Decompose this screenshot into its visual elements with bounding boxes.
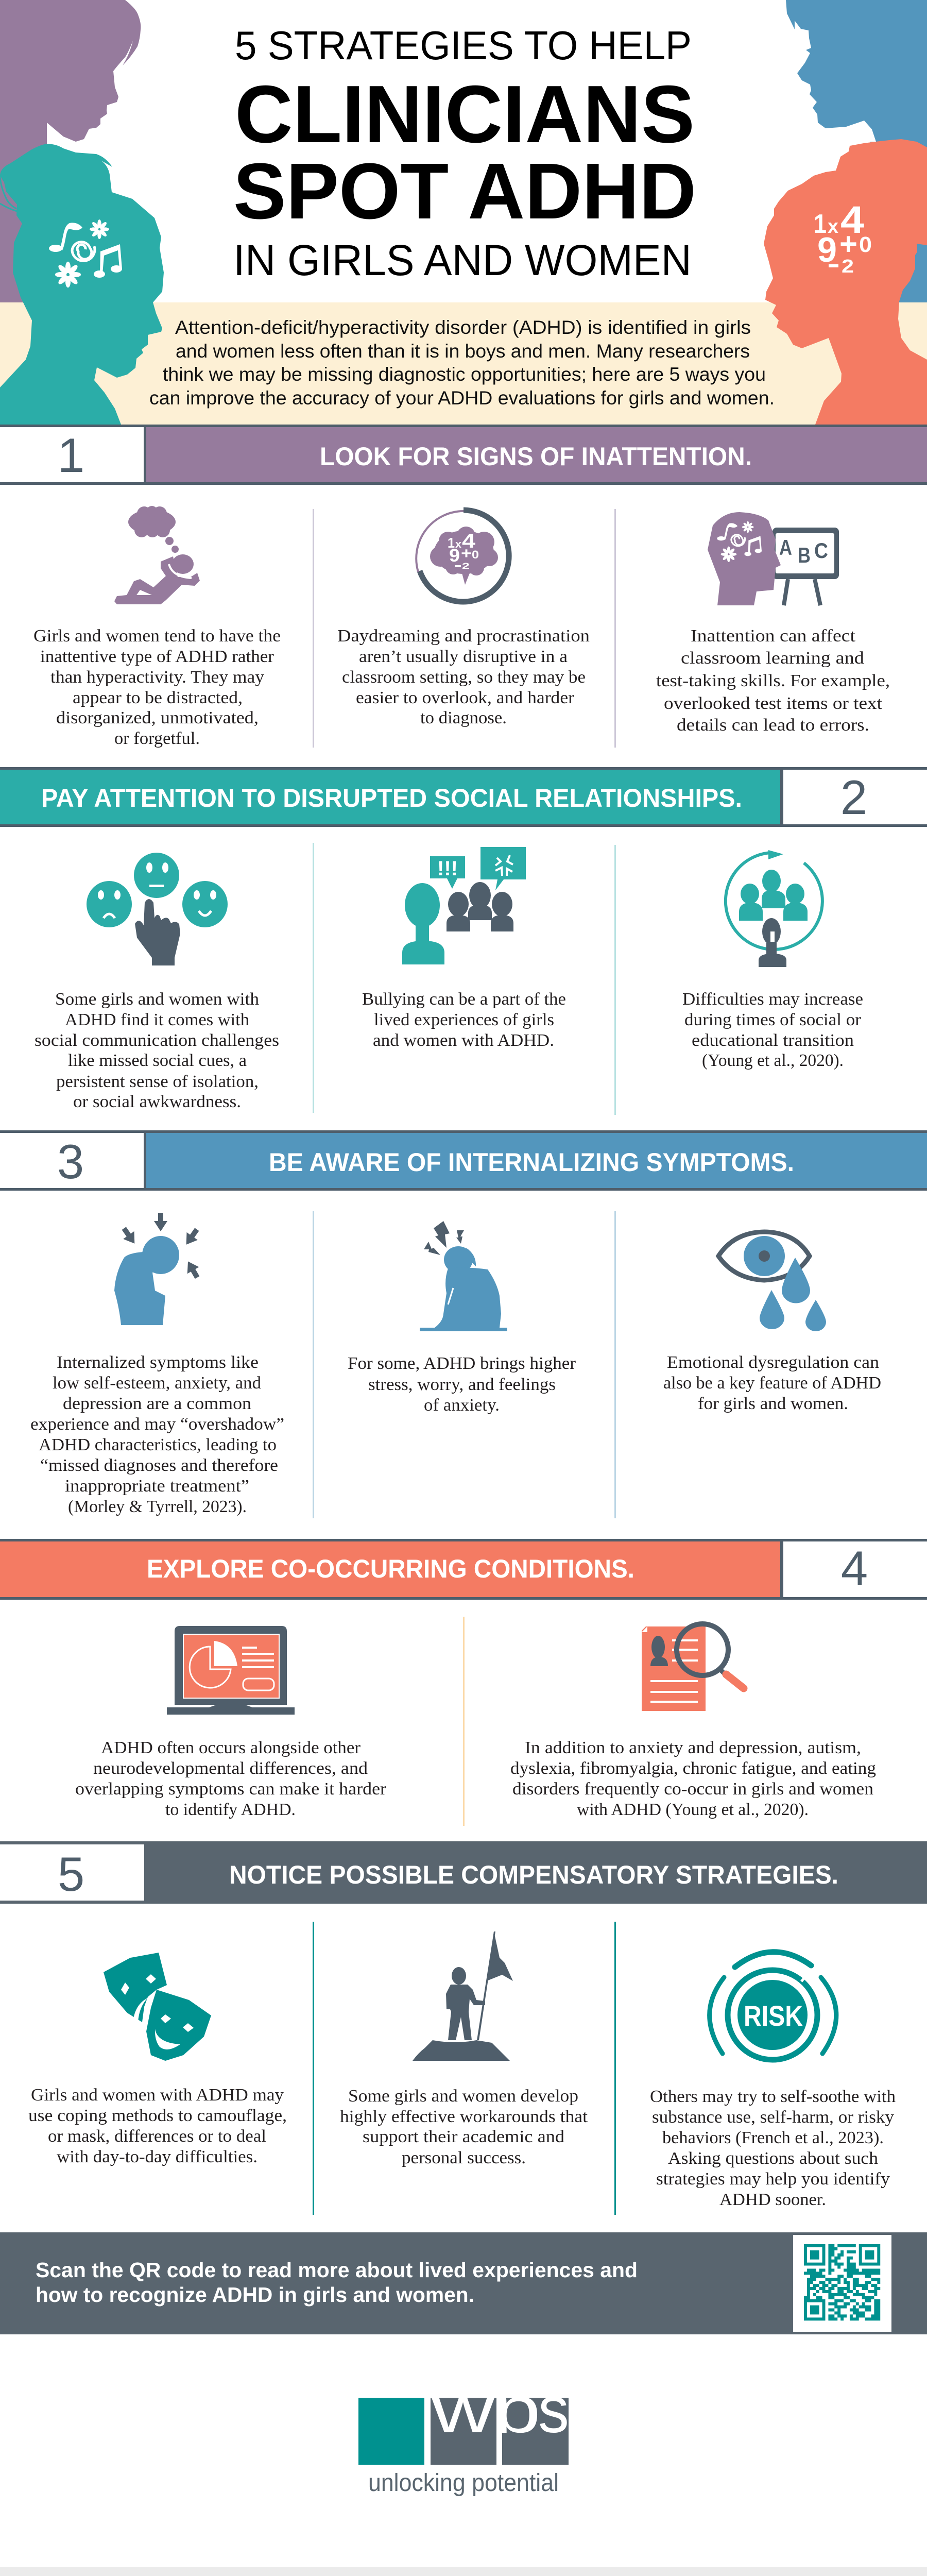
text: column 3 inattention: test-taking skills. For example, bbox=[656, 671, 890, 690]
text: co-occurring left: overlapping symptoms can make it harder bbox=[75, 1780, 387, 1799]
section 4 banner bbox=[0, 1539, 927, 1600]
section 4 banner: EXPLORE CO-OCCURRING CONDITIONS. bbox=[147, 1554, 634, 1583]
text: column 3 social: during times of social or bbox=[684, 1010, 862, 1029]
icon: risk dial: RISK bbox=[744, 1999, 803, 2032]
silhouette: coral woman with numbers: 1 bbox=[814, 209, 827, 239]
section 5 banner: 5 bbox=[58, 1847, 84, 1901]
text: column 2 social: lived experiences of girls bbox=[374, 1010, 554, 1029]
silhouette: coral woman with numbers: 9 bbox=[817, 230, 837, 269]
text: column 3 inattention: Inattention can affect bbox=[691, 626, 856, 646]
text: column 3 inattention: overlooked test items or text bbox=[664, 694, 883, 713]
references panel bbox=[0, 2567, 927, 2576]
text: column 3 internalizing bbox=[663, 1353, 881, 1413]
text: column 2 inattention: Daydreaming and procrastination bbox=[337, 626, 590, 646]
text: column 1 internalizing: “missed diagnoses and therefore bbox=[40, 1456, 278, 1475]
WPS logo: w bbox=[431, 2373, 495, 2447]
icon: faces and pointing hand bbox=[87, 853, 228, 965]
text: column 2 social: and women with ADHD. bbox=[373, 1031, 554, 1050]
silhouette: coral woman with numbers bbox=[764, 139, 927, 425]
silhouette: coral woman with numbers: + bbox=[839, 227, 857, 261]
icon: head and ABC board: A bbox=[779, 535, 792, 560]
text: co-occurring left: to identify ADHD. bbox=[165, 1800, 296, 1819]
section 1 banner: 1 bbox=[58, 428, 84, 482]
text: column 1 compensatory bbox=[28, 2086, 287, 2166]
text: column 2 inattention: aren’t usually disruptive in a bbox=[359, 647, 568, 666]
text: column 1 compensatory: or mask, differences or to deal bbox=[48, 2127, 266, 2146]
text: co-occurring right: disorders frequently co-occur in girls and women bbox=[512, 1780, 873, 1799]
text: column 1 inattention: than hyperactivity. They may bbox=[50, 668, 264, 687]
section 2 banner bbox=[0, 767, 927, 827]
QR code bbox=[793, 2235, 891, 2332]
text: column 2 social bbox=[362, 990, 566, 1050]
QR call-to-action banner bbox=[0, 2232, 927, 2334]
callout text bbox=[36, 2258, 638, 2307]
icon: risk dial bbox=[710, 1952, 836, 2060]
callout text: Scan the QR code to read more about lived experiences and bbox=[36, 2258, 638, 2282]
text: column 1 internalizing: Internalized symptoms like bbox=[57, 1353, 259, 1372]
text: column 1 social: social communication challenges bbox=[35, 1031, 279, 1050]
title: SPOT ADHD bbox=[233, 147, 696, 235]
icon: head and ABC board bbox=[708, 512, 839, 605]
section 4 banner: 4 bbox=[841, 1541, 868, 1595]
text: column 2 compensatory: personal success. bbox=[402, 2148, 526, 2167]
text: column 1 inattention: disorganized, unmotivated, bbox=[56, 708, 259, 727]
text: column 1 inattention: appear to be distracted, bbox=[73, 688, 243, 707]
intro text: can improve the accuracy of your ADHD evaluations for girls and women. bbox=[149, 387, 775, 409]
text: column 1 internalizing: depression are a common bbox=[63, 1394, 251, 1413]
text: column 3 internalizing: Emotional dysregulation can bbox=[667, 1353, 879, 1372]
text: column 2 inattention bbox=[337, 626, 590, 727]
text: column 2 compensatory: highly effective workarounds that bbox=[340, 2107, 588, 2126]
icon: head and ABC board: B bbox=[798, 543, 811, 567]
text: column 1 internalizing: inappropriate treatment” bbox=[65, 1477, 249, 1496]
icon: bullying speech bubbles: !!! bbox=[437, 857, 458, 880]
intro text: Attention-deficit/hyperactivity disorder (ADHD) is identified in girls bbox=[175, 317, 751, 338]
icon: ring with numbers in brain: x bbox=[455, 539, 461, 550]
silhouette: coral woman with numbers: x bbox=[828, 216, 838, 238]
text: column 1 inattention: or forgetful. bbox=[114, 729, 200, 748]
text: column 1 internalizing: (Morley & Tyrrell, 2023). bbox=[68, 1497, 247, 1516]
icon: crying eye bbox=[718, 1232, 826, 1331]
text: column 1 internalizing: low self-esteem, anxiety, and bbox=[53, 1374, 261, 1393]
icon: document with magnifier bbox=[642, 1624, 744, 1711]
silhouette: blue woman bbox=[786, 0, 927, 302]
section 2 banner: 2 bbox=[840, 770, 867, 824]
section 2 banner: PAY ATTENTION TO DISRUPTED SOCIAL RELATIONSHIPS. bbox=[41, 784, 742, 812]
text: column 1 social: or social awkwardness. bbox=[73, 1092, 241, 1111]
section 5 banner: NOTICE POSSIBLE COMPENSATORY STRATEGIES. bbox=[229, 1860, 838, 1889]
text: column 1 social: Some girls and women with bbox=[55, 990, 259, 1009]
silhouette: purple woman bbox=[0, 0, 141, 302]
text: co-occurring right: dyslexia, fibromyalgia, chronic fatigue, and eating bbox=[510, 1759, 876, 1778]
text: co-occurring left: ADHD often occurs alongside other bbox=[101, 1738, 361, 1757]
text: co-occurring right bbox=[510, 1738, 876, 1819]
icon: ring with numbers in brain bbox=[416, 510, 509, 602]
silhouette: coral woman with numbers: 0 bbox=[859, 232, 872, 257]
icon: ring with numbers in brain: + bbox=[461, 545, 472, 562]
text: column 1 social: like missed social cues, a bbox=[68, 1051, 247, 1070]
text: column 2 social: Bullying can be a part of the bbox=[362, 990, 566, 1009]
text: column 2 inattention: to diagnose. bbox=[420, 708, 507, 727]
silhouette: coral woman with numbers: 4 bbox=[840, 198, 864, 241]
text: column 2 internalizing: of anxiety. bbox=[424, 1396, 500, 1415]
text: co-occurring right: with ADHD (Young et al., 2020). bbox=[577, 1800, 809, 1819]
text: column 1 social bbox=[35, 990, 279, 1111]
text: column 3 social bbox=[682, 990, 863, 1070]
title: 5 STRATEGIES TO HELP bbox=[235, 23, 692, 68]
silhouette: coral woman with numbers: 2 bbox=[842, 256, 854, 277]
text: column 3 social: Difficulties may increase bbox=[682, 990, 863, 1009]
section 3 banner bbox=[0, 1130, 927, 1191]
text: column 3 compensatory: Others may try to self-soothe with bbox=[650, 2087, 896, 2106]
WPS logo: p bbox=[493, 2373, 541, 2447]
text: column 1 internalizing bbox=[30, 1353, 284, 1516]
text: column 1 inattention: inattentive type of ADHD rather bbox=[40, 647, 274, 666]
icon: pressured person with arrows bbox=[114, 1213, 203, 1325]
title: IN GIRLS AND WOMEN bbox=[233, 236, 692, 284]
text: column 2 inattention: easier to overlook, and harder bbox=[356, 688, 575, 707]
text: column 3 compensatory: substance use, self-harm, or risky bbox=[652, 2108, 894, 2127]
icon: daydreaming figure bbox=[114, 506, 200, 604]
text: co-occurring left: neurodevelopmental differences, and bbox=[93, 1759, 368, 1778]
intro text: think we may be missing diagnostic opportunities; here are 5 ways you bbox=[163, 364, 766, 385]
section 5 banner bbox=[0, 1841, 927, 1904]
WPS logo bbox=[358, 2373, 569, 2497]
icon: ring with numbers in brain: 2 bbox=[462, 561, 470, 571]
text: column 3 compensatory: Asking questions about such bbox=[668, 2149, 878, 2168]
section 1 banner: LOOK FOR SIGNS OF INATTENTION. bbox=[320, 442, 752, 471]
text: column 2 inattention: classroom setting, so they may be bbox=[342, 668, 586, 687]
text: column 3 inattention: classroom learning and bbox=[681, 649, 864, 668]
WPS logo: s bbox=[538, 2373, 569, 2447]
text: column 1 internalizing: ADHD characteristics, leading to bbox=[39, 1435, 277, 1454]
icon: transition circle with people bbox=[726, 850, 822, 967]
text: co-occurring left bbox=[75, 1738, 387, 1819]
text: column 3 social: educational transition bbox=[692, 1031, 854, 1050]
icon: bullying speech bubbles bbox=[402, 847, 526, 964]
text: column 1 compensatory: with day-to-day difficulties. bbox=[57, 2147, 258, 2166]
text: column 2 internalizing: For some, ADHD brings higher bbox=[348, 1354, 576, 1373]
text: column 1 inattention bbox=[33, 626, 281, 748]
icon: ring with numbers in brain: 0 bbox=[472, 548, 479, 561]
icon: monitor with chart bbox=[167, 1626, 295, 1715]
text: column 2 compensatory: support their academic and bbox=[363, 2127, 564, 2146]
text: column 3 inattention: details can lead to errors. bbox=[677, 716, 869, 735]
intro text bbox=[149, 317, 775, 409]
text: column 2 compensatory: Some girls and women develop bbox=[348, 2087, 578, 2106]
section 3 banner: BE AWARE OF INTERNALIZING SYMPTOMS. bbox=[269, 1148, 794, 1177]
icon: theatre masks bbox=[104, 1953, 211, 2061]
intro text: and women less often than it is in boys and men. Many researchers bbox=[176, 341, 750, 362]
text: column 3 internalizing: also be a key feature of ADHD bbox=[663, 1374, 881, 1393]
icon: person with flag on mountain bbox=[413, 1931, 513, 2061]
text: column 1 compensatory: use coping methods to camouflage, bbox=[28, 2106, 287, 2125]
icon: ring with numbers in brain: 1 bbox=[448, 535, 455, 551]
icon: ring with numbers in brain: 4 bbox=[462, 530, 475, 552]
text: column 3 compensatory: strategies may help you identify bbox=[656, 2170, 890, 2189]
callout text: how to recognize ADHD in girls and women. bbox=[36, 2283, 474, 2307]
silhouette: teal woman with music icons bbox=[0, 144, 164, 425]
text: column 1 social: persistent sense of isolation, bbox=[56, 1072, 259, 1091]
text: column 2 internalizing: stress, worry, and feelings bbox=[368, 1375, 556, 1394]
text: column 3 compensatory bbox=[650, 2087, 896, 2209]
text: co-occurring right: In addition to anxiety and depression, autism, bbox=[525, 1738, 861, 1757]
section 3 banner: 3 bbox=[57, 1134, 84, 1189]
text: column 2 compensatory bbox=[340, 2087, 588, 2167]
text: column 1 compensatory: Girls and women with ADHD may bbox=[31, 2086, 284, 2105]
title: CLINICIANS bbox=[235, 69, 695, 160]
text: column 3 inattention bbox=[656, 626, 890, 735]
text: column 3 compensatory: behaviors (French et al., 2023). bbox=[662, 2128, 884, 2147]
title bbox=[233, 23, 696, 284]
header background: cream band bbox=[0, 302, 927, 425]
icon: hunched person with lightning bbox=[420, 1221, 507, 1331]
icon: head and ABC board: C bbox=[814, 538, 828, 563]
text: column 1 social: ADHD find it comes with bbox=[65, 1010, 249, 1029]
text: column 1 internalizing: experience and may “overshadow” bbox=[30, 1415, 284, 1434]
text: column 3 internalizing: for girls and women. bbox=[698, 1394, 848, 1413]
text: column 3 social: (Young et al., 2020). bbox=[702, 1051, 844, 1070]
section 1 banner bbox=[0, 425, 927, 485]
icon: ring with numbers in brain: 9 bbox=[449, 546, 460, 566]
WPS logo: unlocking potential bbox=[368, 2469, 559, 2497]
text: column 2 internalizing bbox=[348, 1354, 576, 1415]
text: column 1 inattention: Girls and women tend to have the bbox=[33, 626, 281, 646]
text: column 3 compensatory: ADHD sooner. bbox=[719, 2190, 826, 2209]
